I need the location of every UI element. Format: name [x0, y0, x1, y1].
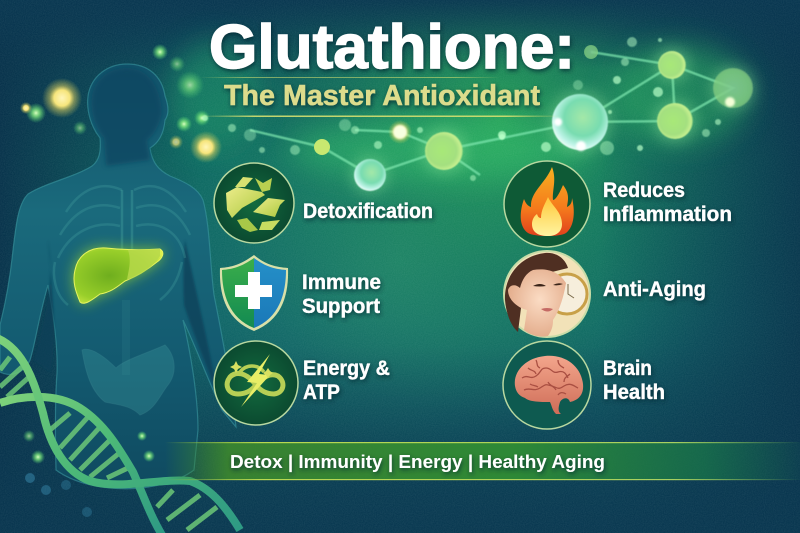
- decorative lights left: [20, 44, 222, 517]
- item: immune support: [220, 255, 381, 331]
- banner text: Detox | Immunity | Energy | Healthy Aging: [230, 452, 605, 472]
- item: detoxification: [214, 163, 433, 243]
- icon: shield with cross: [220, 255, 288, 331]
- spheres: [658, 51, 686, 79]
- label: Brain: [603, 357, 652, 380]
- label line 2: Inflammation: [603, 203, 732, 226]
- label: Detoxification: [303, 200, 433, 223]
- pelvis: [82, 345, 174, 415]
- clock: [547, 274, 587, 314]
- icon: bolt and infinity: [214, 341, 298, 425]
- label line 2: ATP: [303, 381, 340, 404]
- icon: liver recycling: [214, 163, 294, 243]
- label: Energy &: [303, 357, 390, 380]
- title: [200, 13, 575, 117]
- arm gaps: [34, 240, 218, 396]
- speckle dust: [202, 37, 721, 181]
- label: Reduces: [603, 179, 685, 202]
- label line 2: Support: [302, 295, 380, 318]
- DNA helix: [0, 338, 240, 533]
- liver: [74, 248, 163, 303]
- sphere halos: [351, 47, 755, 194]
- big sphere: [552, 94, 608, 150]
- rungs: [0, 357, 217, 530]
- torso and head: [0, 64, 236, 489]
- label line 2: Health: [603, 381, 665, 404]
- human body silhouette: [0, 64, 236, 489]
- subtitle rule top: [200, 77, 500, 78]
- bonds: [250, 52, 733, 175]
- item: anti-aging: [504, 251, 706, 337]
- label: Immune: [302, 271, 381, 294]
- item: brain health: [503, 341, 665, 429]
- head shadow: [92, 68, 162, 166]
- item: energy and ATP: [214, 341, 390, 425]
- strand back: [0, 397, 162, 533]
- item: reduces inflammation: [504, 161, 732, 247]
- strand front: [0, 338, 240, 530]
- subtitle: The Master Antioxidant: [224, 80, 540, 112]
- subtitle rule bottom: [200, 116, 560, 117]
- molecule network: [202, 37, 755, 194]
- rib cage: [54, 186, 190, 375]
- bottom banner: [165, 442, 800, 480]
- icon: face and clock: [504, 251, 590, 337]
- title main: Glutathione:: [209, 13, 575, 82]
- label: Anti-Aging: [603, 278, 706, 301]
- icon: flame: [504, 161, 590, 247]
- icon: brain: [503, 341, 591, 429]
- face: [505, 253, 568, 337]
